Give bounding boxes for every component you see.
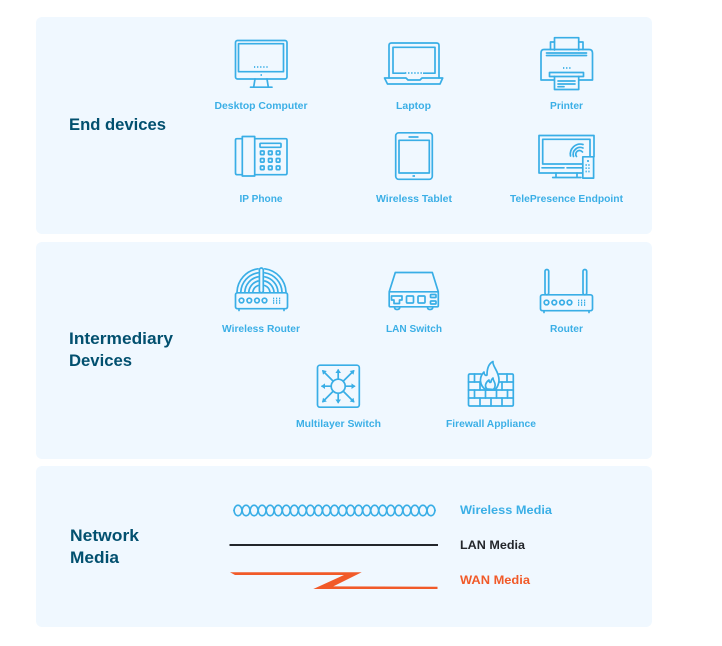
icon: LAN switch <box>389 272 438 310</box>
icon: laptop <box>384 43 443 84</box>
icon: desktop computer <box>236 40 287 87</box>
icon: IP phone <box>236 136 287 176</box>
LAN media line <box>230 544 438 546</box>
icon: firewall appliance <box>468 362 513 406</box>
heading: intermediary devices: Devices <box>69 352 132 370</box>
heading: end devices: End devices <box>69 116 166 134</box>
label: router: Router <box>550 323 583 335</box>
WAN media line <box>230 572 438 589</box>
label: laptop: Laptop <box>396 100 431 112</box>
panel: end devices <box>36 17 652 234</box>
heading: intermediary devices: Intermediary <box>69 330 174 348</box>
label: printer: Printer <box>550 100 583 112</box>
label: wireless tablet: Wireless Tablet <box>376 193 453 205</box>
heading: network media: Media <box>70 549 120 567</box>
icon: telepresence endpoint <box>539 136 594 178</box>
icon: router <box>540 270 592 312</box>
label: desktop computer: Desktop Computer <box>214 100 308 112</box>
icon: wireless router <box>236 268 288 310</box>
wireless media line <box>234 505 435 516</box>
icon: multilayer switch <box>318 365 359 407</box>
label: WAN media: WAN Media <box>460 573 530 587</box>
label: wireless router: Wireless Router <box>222 323 300 335</box>
panel: network media <box>36 466 652 627</box>
label: firewall appliance: Firewall Appliance <box>446 418 536 430</box>
heading: network media: Network <box>70 527 140 545</box>
label: telepresence endpoint: TelePresence Endpoint <box>510 193 623 205</box>
heading: network media <box>70 527 140 567</box>
heading: intermediary devices <box>69 330 174 370</box>
panel: intermediary devices <box>36 242 652 459</box>
label: LAN media: LAN Media <box>460 538 525 552</box>
icon: wireless tablet <box>396 133 432 179</box>
label: LAN switch: LAN Switch <box>386 323 442 335</box>
label: multilayer switch: Multilayer Switch <box>296 418 381 430</box>
label: IP phone: IP Phone <box>240 193 283 205</box>
icon: printer <box>541 38 592 90</box>
label: wireless media: Wireless Media <box>460 503 552 517</box>
